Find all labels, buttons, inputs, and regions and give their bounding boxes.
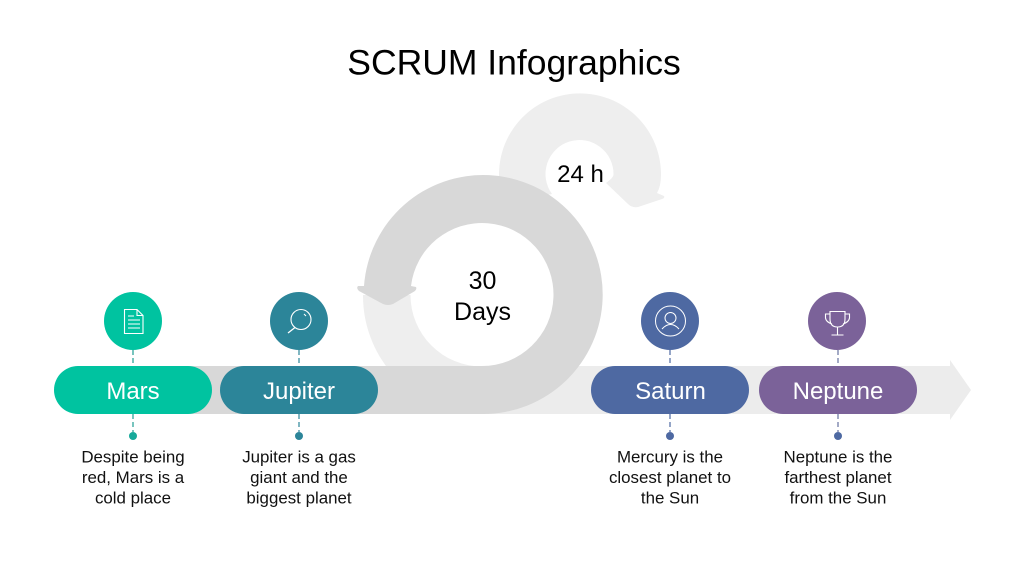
description: Saturn: Mercury is the [617, 448, 723, 466]
icon: document [104, 292, 162, 350]
step: Mars [54, 292, 212, 508]
big loop and timeline dark section [133, 175, 603, 414]
description: Neptune: from the Sun [790, 488, 886, 508]
icon: trophy [808, 292, 866, 350]
pill: Neptune [759, 366, 917, 414]
description: Neptune: Neptune is the [784, 448, 892, 466]
description: Jupiter: Jupiter is a gas [242, 448, 356, 466]
description: Neptune: farthest planet [784, 468, 892, 487]
pill: Mars: Mars [106, 378, 160, 405]
pill: Saturn [591, 366, 749, 414]
step: Neptune [759, 292, 917, 508]
pill: Mars [54, 366, 212, 414]
timeline arrow light section [482, 360, 971, 420]
label: 24 h: 24 h [557, 161, 604, 188]
step: Jupiter [220, 292, 378, 508]
label: 30 Days: Days [454, 298, 511, 326]
description: Jupiter: giant and the [250, 468, 348, 487]
icon: user [641, 292, 699, 350]
title: SCRUM Infographics [347, 42, 681, 82]
description: Mars: Despite being [81, 448, 185, 466]
step: Saturn [591, 292, 749, 508]
pill: Saturn: Saturn [635, 378, 706, 405]
small sprint loop arrow [499, 93, 664, 207]
label: 30 Days: 30 [469, 267, 496, 295]
icon: magnifier [270, 292, 328, 350]
description: Saturn: closest planet to [609, 468, 731, 487]
pill: Neptune: Neptune [793, 378, 883, 405]
description: Mars: red, Mars is a [82, 468, 185, 487]
pill: Jupiter: Jupiter [263, 378, 335, 405]
big loop light lower-left section [363, 295, 482, 414]
description: Saturn: the Sun [641, 488, 699, 508]
description: Mars: cold place [95, 488, 171, 508]
pill: Jupiter [220, 366, 378, 414]
description: Jupiter: biggest planet [246, 488, 352, 508]
